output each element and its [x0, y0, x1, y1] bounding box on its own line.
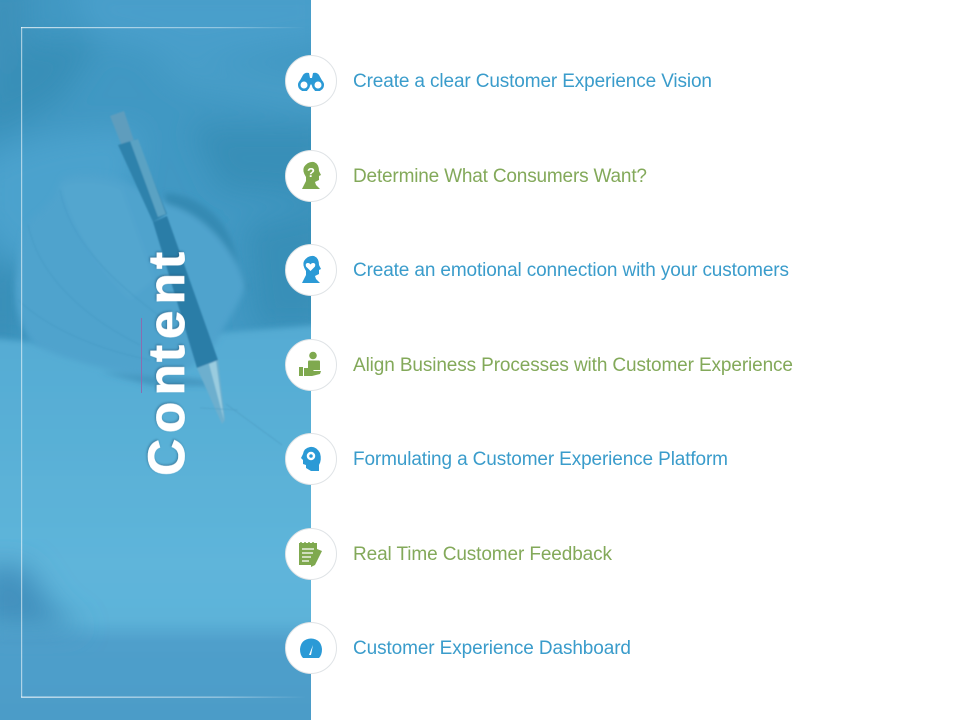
- icon: notepad and pencil: [286, 528, 336, 580]
- icon: binoculars: [286, 56, 336, 106]
- icon: head with heart: [286, 244, 336, 296]
- hand shape: [15, 173, 245, 376]
- label: Determine What Consumers Want?: [353, 166, 647, 187]
- label: Create a clear Customer Experience Vision: [353, 71, 712, 92]
- sleeve shadow: [166, 194, 234, 254]
- icon: head with question mark: ?: [307, 165, 315, 180]
- label: Formulating a Customer Experience Platform: [353, 449, 728, 470]
- item 3: [286, 244, 789, 296]
- item 1: [286, 56, 712, 106]
- decorative frame: [21, 27, 306, 698]
- item 7: [286, 622, 631, 674]
- accent line: [141, 318, 142, 393]
- icon: head with gear: [286, 434, 336, 484]
- item 5: [286, 434, 728, 484]
- item 4: [286, 340, 793, 390]
- icon: dashboard gauge: [286, 622, 336, 674]
- label: Create an emotional connection with your customers: [353, 260, 789, 281]
- paper: [0, 325, 320, 720]
- label: Real Time Customer Feedback: [353, 544, 612, 565]
- icon: head with question mark: [286, 150, 336, 202]
- panel: photo background: [0, 0, 330, 720]
- label: Align Business Processes with Customer Experience: [353, 355, 793, 376]
- icon: hand holding person: [286, 340, 336, 390]
- label: Customer Experience Dashboard: [353, 638, 631, 659]
- title: Content: [138, 252, 195, 476]
- pen: [110, 111, 134, 146]
- item 6: [286, 528, 612, 580]
- item 2: [286, 150, 647, 202]
